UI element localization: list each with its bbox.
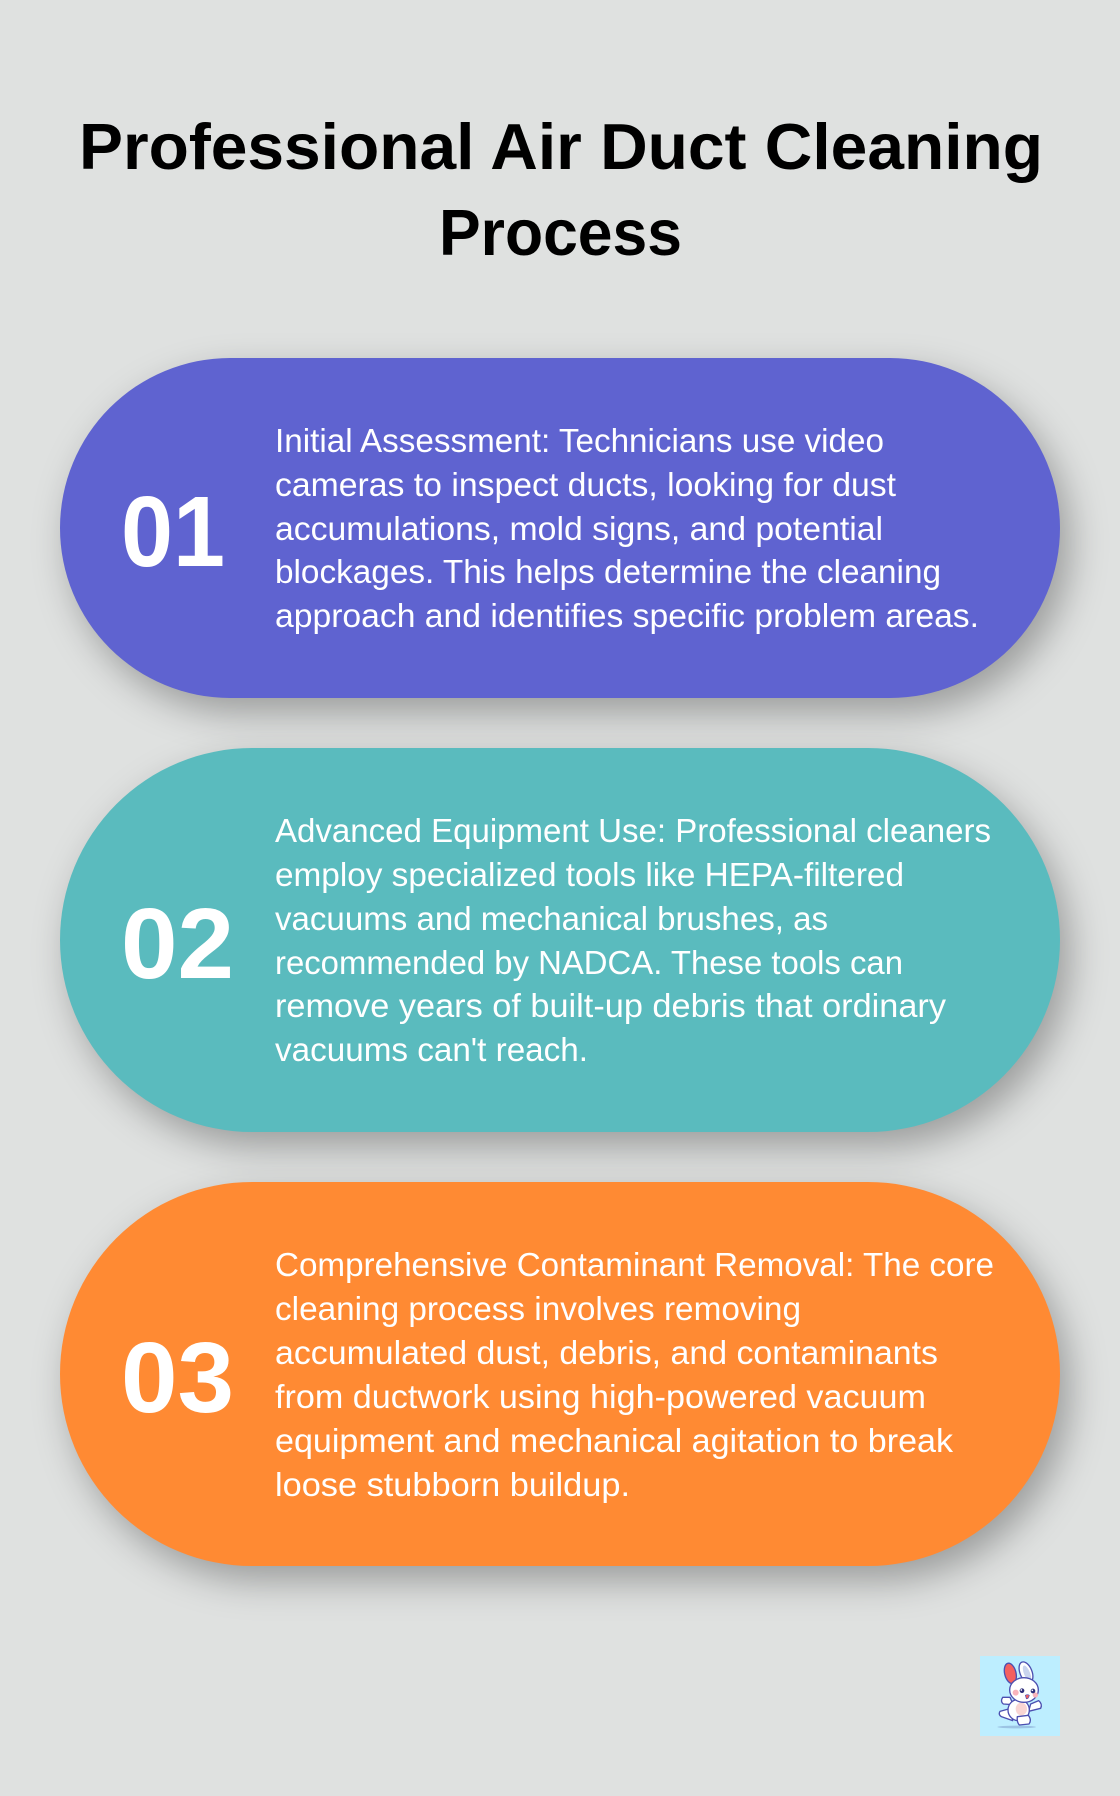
title: Professional Air Duct Cleaning (79, 110, 1043, 183)
text block: step 01: blockages. This helps determine the cleaning (275, 553, 941, 590)
text block: step 02: remove years of built-up debris that ordinary (275, 987, 947, 1024)
step number 02: 02 (121, 888, 234, 1000)
text block: step 03: accumulated dust, debris, and contaminants (275, 1334, 938, 1371)
icon: running rabbit logo (980, 1656, 1060, 1736)
panel: step 01 initial assessment (60, 358, 1060, 698)
text block: step 02 (275, 812, 991, 1068)
text block: step 03 (275, 1246, 994, 1503)
text block: step 01: Initial Assessment: Technicians use video (275, 422, 884, 459)
text block: step 02: Advanced Equipment Use: Professional cleaners (275, 812, 991, 849)
title: Process (439, 196, 682, 269)
panel: step 02 advanced equipment use (60, 748, 1060, 1132)
text block: step 01: accumulations, mold signs, and potential (275, 510, 883, 547)
text block: step 03: loose stubborn buildup. (275, 1466, 630, 1503)
panel: step 03 comprehensive contaminant removal (60, 1182, 1060, 1566)
text block: step 03: Comprehensive Contaminant Removal: The core (275, 1246, 994, 1283)
text block: step 02: vacuums can't reach. (275, 1031, 588, 1068)
text block: step 03: from ductwork using high-powered vacuum (275, 1378, 926, 1415)
step number 03: 03 (121, 1322, 234, 1434)
title (79, 110, 1043, 269)
text block: step 03: cleaning process involves removing (275, 1290, 801, 1327)
text block: step 02: recommended by NADCA. These tools can (275, 944, 903, 981)
text block: step 01: approach and identifies specific problem areas. (275, 597, 979, 634)
text block: step 02: employ specialized tools like HEPA-filtered (275, 856, 904, 893)
text block: step 03: equipment and mechanical agitation to break (275, 1422, 954, 1459)
text block: step 02: vacuums and mechanical brushes, as (275, 900, 828, 937)
text block: step 01 (275, 422, 979, 634)
step number 01: 01 (121, 476, 225, 588)
text block: step 01: cameras to inspect ducts, looking for dust (275, 466, 896, 503)
